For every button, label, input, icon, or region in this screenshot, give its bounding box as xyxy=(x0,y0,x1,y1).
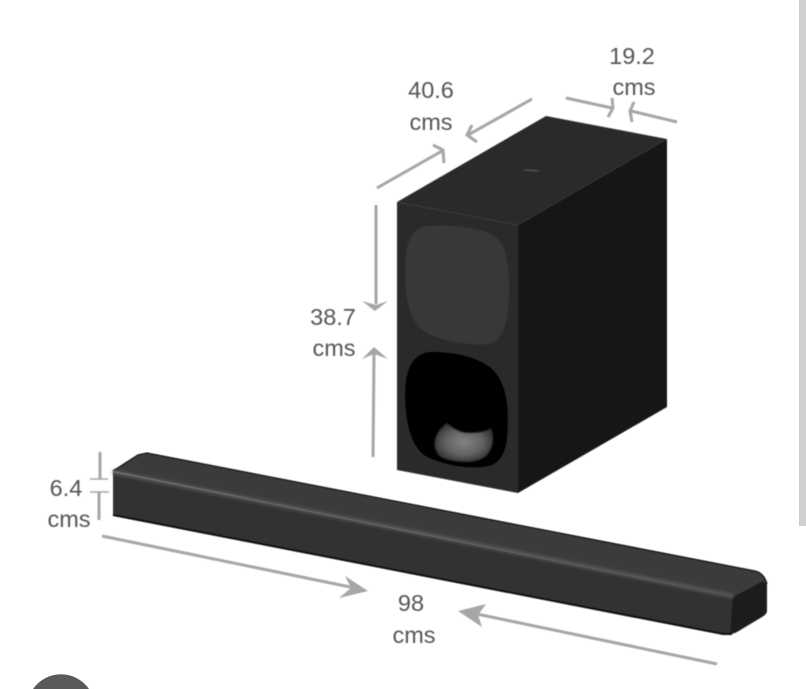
label: length xyxy=(392,590,436,648)
dimension labels xyxy=(47,43,656,648)
label: bar height xyxy=(47,475,91,532)
arrow: depth upper xyxy=(467,99,532,142)
scrollbar xyxy=(799,0,806,526)
arrow: height lower xyxy=(362,347,388,457)
subwoofer logo xyxy=(524,170,539,171)
label: height: 38.7 xyxy=(310,304,356,330)
label: length: cms xyxy=(392,622,436,648)
port cone xyxy=(435,423,493,462)
label: bar height: cms xyxy=(47,506,91,532)
woofer panel xyxy=(405,226,509,344)
soundbar end cap xyxy=(730,581,767,634)
label: width xyxy=(609,43,656,100)
arrow: length left xyxy=(102,536,368,598)
arrow: depth lower xyxy=(377,145,444,188)
label: length: 98 xyxy=(398,590,424,616)
soundbar top face xyxy=(113,453,767,597)
avatar circle xyxy=(33,674,89,689)
label: height: cms xyxy=(312,335,356,361)
label: width: cms xyxy=(612,74,656,100)
subwoofer top face xyxy=(397,116,667,225)
soundbar bottom edge xyxy=(113,515,732,634)
label: width: 19.2 xyxy=(609,43,655,69)
label: height xyxy=(310,304,356,361)
bass port xyxy=(405,352,508,468)
label: depth xyxy=(408,77,454,135)
label: depth: 40.6 xyxy=(408,77,454,103)
soundbar xyxy=(113,453,767,634)
subwoofer right face xyxy=(518,139,667,493)
arrow: height upper xyxy=(362,205,388,311)
arrow: bar height bottom xyxy=(90,492,109,520)
subwoofer xyxy=(397,116,667,493)
arrow: width right xyxy=(630,102,677,122)
arrow: width left xyxy=(566,98,613,117)
arrow: bar height top xyxy=(90,452,108,479)
subwoofer front face xyxy=(397,202,518,493)
soundbar front face xyxy=(113,472,733,634)
label: bar height: 6.4 xyxy=(50,475,82,501)
dimension arrows xyxy=(90,98,717,664)
arrow: length right xyxy=(458,604,717,664)
soundbar highlight xyxy=(113,472,733,596)
port opening xyxy=(405,352,508,468)
soundbar top edge xyxy=(113,453,767,584)
label: depth: cms xyxy=(409,109,453,135)
